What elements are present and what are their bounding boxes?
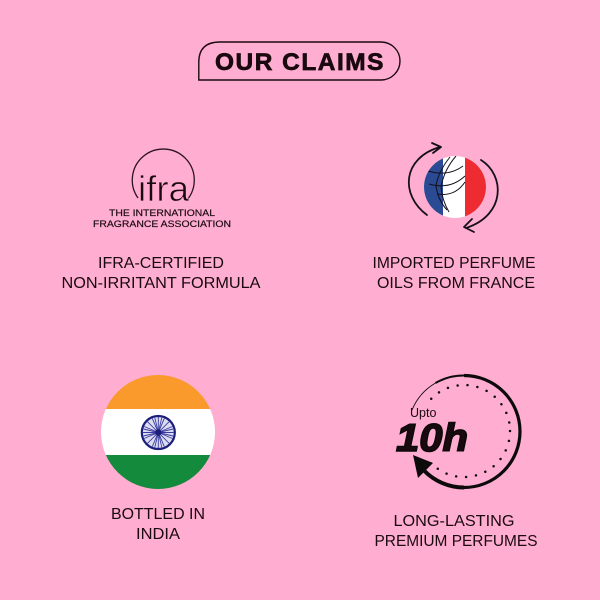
panel: ifra certified: NON-IRRITANT FORMULA <box>62 275 261 292</box>
panel: bottled in India <box>100 374 216 543</box>
text: long-lasting caption: LONG-LASTING <box>394 513 514 530</box>
text: France caption: IMPORTED PERFUME <box>372 255 536 272</box>
arrow: lower right <box>464 160 498 232</box>
icon: 10 hour clock <box>395 375 520 488</box>
icon: ifra logo: ifra <box>138 168 190 209</box>
arrow: upper left <box>409 143 441 215</box>
icon: ifra logo: FRAGRANCE ASSOCIATION <box>93 219 231 230</box>
icon: ifra logo: THE INTERNATIONAL <box>109 208 215 219</box>
arrow head <box>413 455 433 478</box>
text: ifra caption: IFRA-CERTIFIED <box>98 255 224 272</box>
panel: bottled in India: INDIA <box>136 526 181 543</box>
icon: Indian flag <box>100 374 216 490</box>
icon: 10 hour clock: 10h <box>396 417 468 460</box>
icon: 10 hour clock: Upto <box>410 406 436 420</box>
title: OUR CLAIMS <box>215 49 385 76</box>
icon: ifra logo <box>93 149 231 230</box>
panel: ifra certified <box>62 149 261 292</box>
panel: long-lasting perfumes: PREMIUM PERFUMES <box>374 533 538 550</box>
panel: long-lasting perfumes <box>374 375 538 550</box>
title <box>199 42 400 80</box>
panel: imported oils from France <box>372 143 536 292</box>
icon: French flag globe <box>409 143 498 232</box>
text: India caption: BOTTLED IN <box>111 506 205 523</box>
panel: imported oils from France: OILS FROM FRANCE <box>377 275 535 292</box>
